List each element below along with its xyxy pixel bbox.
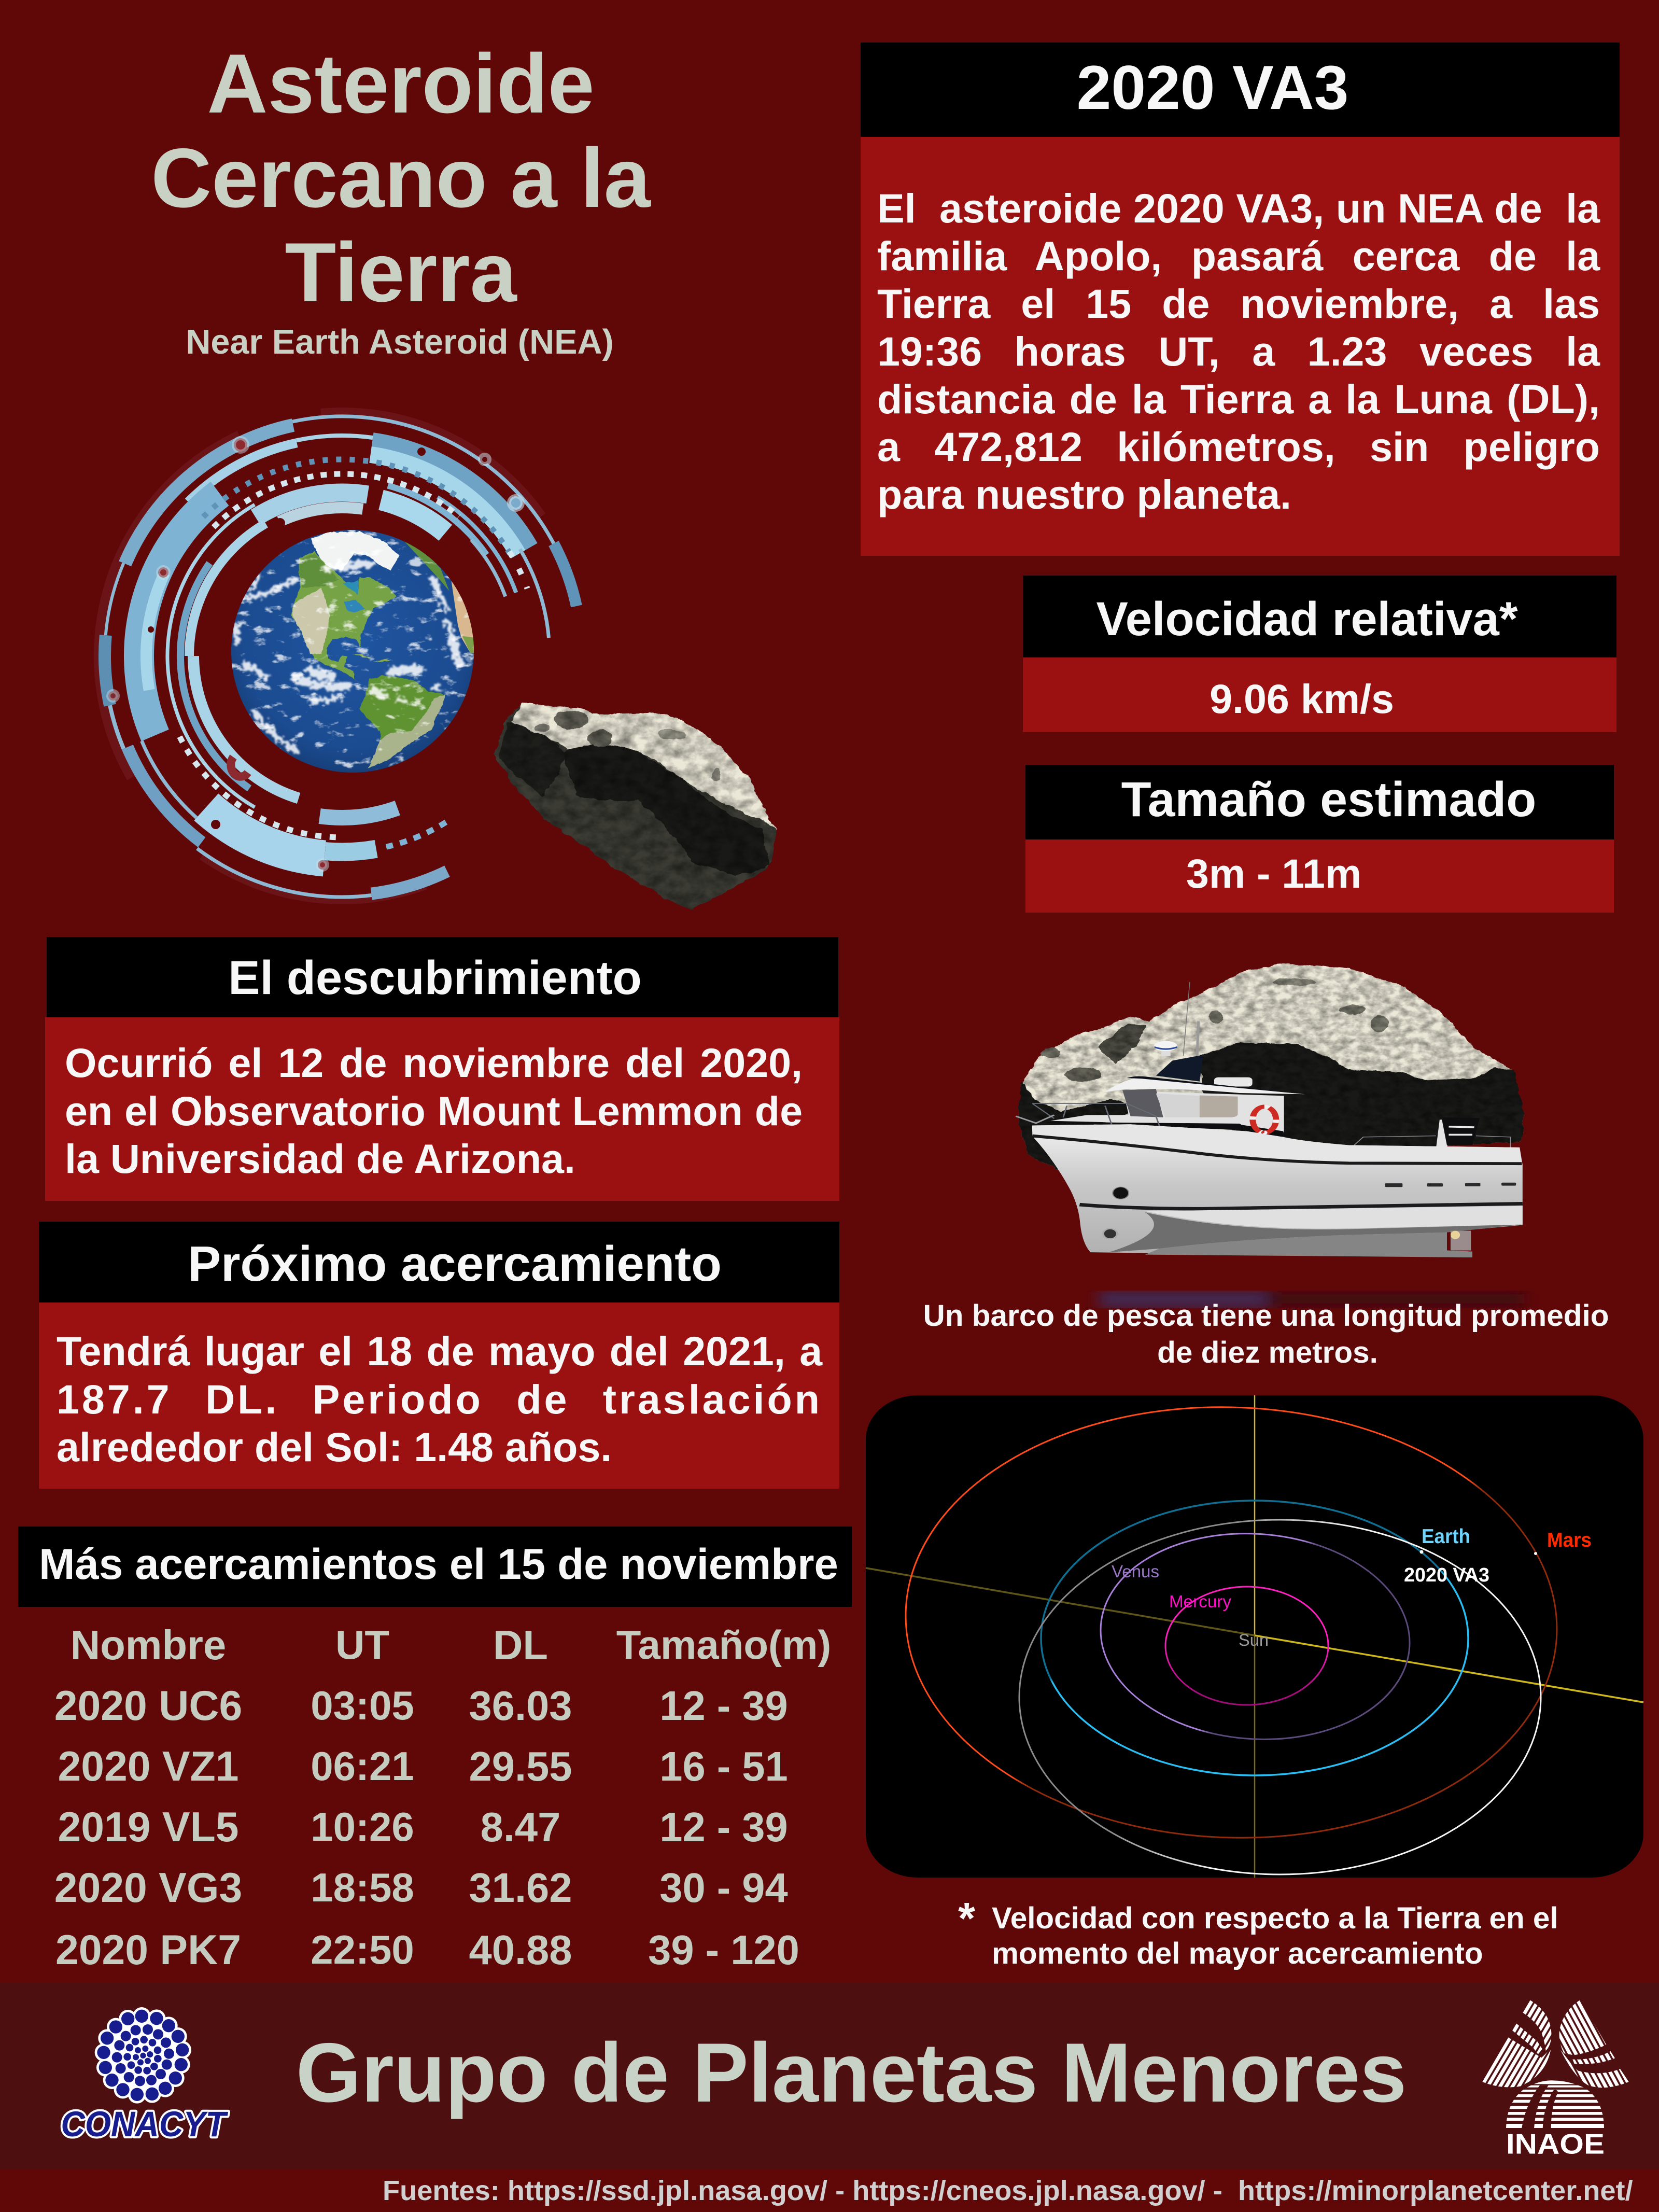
header bar (1025, 765, 1614, 839)
heading: El descubrimiento (228, 951, 642, 1004)
table: más acercamientos: 40.88 (469, 1927, 572, 1973)
caption: boat comparison: de diez metros. (1157, 1336, 1378, 1369)
table: más acercamientos: 2020 PK7 (55, 1927, 241, 1973)
cloud bands (237, 564, 460, 750)
footnote: * (958, 1894, 975, 1943)
table: más acercamientos: 2020 VZ1 (58, 1743, 239, 1790)
heading: Velocidad relativa* (1096, 593, 1518, 646)
footer title: Grupo de Planetas Menores (296, 2026, 1407, 2120)
description: para nuestro planeta. (877, 471, 1291, 517)
hull (1032, 1124, 1523, 1257)
text: alrededor del Sol: 1.48 años. (57, 1424, 612, 1470)
heading: Tamaño estimado (1121, 772, 1536, 827)
body box (39, 1303, 839, 1489)
table: más acercamientos: 36.03 (469, 1683, 572, 1729)
footer band (0, 1983, 1659, 2169)
text (65, 1039, 803, 1183)
value: 3m - 11m (1186, 850, 1361, 897)
superstructure (1016, 982, 1511, 1149)
title: Asteroide (207, 37, 595, 131)
text: Tendrá lugar el 18 de mayo del 2021, a (57, 1328, 822, 1374)
body box (45, 1017, 839, 1201)
table: más acercamientos (0, 1625, 881, 1972)
table: más acercamientos: 22:50 (311, 1927, 414, 1972)
panel: velocidad relativa (1023, 576, 1616, 732)
table: más acercamientos: 2020 VG3 (54, 1865, 242, 1911)
ring markers (108, 438, 523, 870)
header bar (1023, 576, 1616, 657)
description: distancia de la Tierra a la Luna (DL), (877, 376, 1600, 422)
title (151, 37, 651, 319)
asteroid behind boat (1018, 963, 1524, 1169)
icon: asteroid (494, 703, 776, 909)
body box (861, 137, 1620, 556)
logo: CONACYT: CONACYT (61, 2105, 229, 2144)
header bar (47, 937, 838, 1017)
table: más acercamientos: Tamaño(m) (616, 1622, 831, 1668)
icon: Earth globe (230, 529, 475, 774)
rings (9, 323, 675, 989)
text: la Universidad de Arizona. (65, 1136, 575, 1182)
subtitle: Near Earth Asteroid (NEA) (186, 323, 614, 361)
header bar (861, 43, 1620, 137)
table: más acercamientos: 10:26 (311, 1804, 414, 1850)
Europe limb (404, 541, 449, 591)
value box (1023, 657, 1616, 732)
table: más acercamientos: 18:58 (311, 1865, 414, 1910)
heading: Próximo acercamiento (188, 1236, 722, 1292)
Arctic ice (311, 531, 399, 570)
caption: boat comparison (923, 1299, 1609, 1369)
text: Ocurrió el 12 de noviembre del 2020, (65, 1040, 803, 1086)
title: Tierra (285, 226, 517, 319)
logo: INAOE (1482, 2000, 1629, 2160)
table: más acercamientos: 12 - 39 (659, 1804, 788, 1850)
panel: 2020 VA3 (861, 43, 1620, 556)
table heading: Más acercamientos el 15 de noviembre (39, 1540, 838, 1588)
caption glow (1099, 1292, 1524, 1307)
panel: Próximo acercamiento (39, 1222, 839, 1489)
panel: El descubrimiento (45, 937, 839, 1201)
logos (60, 2000, 1629, 2154)
description: 19:36 horas UT, a 1.23 veces la (877, 328, 1600, 374)
footnote: Velocidad con respecto a la Tierra en el (992, 1901, 1558, 1935)
table: más acercamientos: 2020 UC6 (54, 1683, 242, 1729)
illustration: Earth, tech rings and asteroid (94, 408, 777, 910)
value box (1025, 839, 1614, 913)
title: Cercano a la (151, 131, 651, 225)
orbit diagram: Earth (1422, 1525, 1470, 1548)
logo: INAOE: INAOE (1506, 2127, 1605, 2160)
table: más acercamientos: 12 - 39 (659, 1683, 788, 1729)
table: más acercamientos: 16 - 51 (659, 1743, 788, 1789)
Africa limb (451, 579, 475, 653)
footnote (954, 1897, 1566, 1969)
heading: 2020 VA3 (1077, 53, 1348, 122)
table: más acercamientos: 06:21 (311, 1743, 414, 1789)
table: más acercamientos: 29.55 (469, 1743, 572, 1789)
table: más acercamientos: UT (335, 1622, 389, 1668)
orbit diagram: 2020 VA3 (1404, 1564, 1489, 1586)
South America (359, 676, 446, 768)
table: más acercamientos: Nombre (71, 1622, 226, 1668)
description: familia Apolo, pasará cerca de la (877, 233, 1600, 279)
text: en el Observatorio Mount Lemmon de (65, 1088, 803, 1133)
Central America tail and Caribbean (353, 654, 390, 662)
table: más acercamientos: 31.62 (469, 1865, 572, 1911)
caption: boat comparison: Un barco de pesca tiene una longitud promedio (923, 1299, 1609, 1333)
table: más acercamientos: 2019 VL5 (58, 1804, 239, 1851)
description: El asteroide 2020 VA3, un NEA de la (877, 185, 1600, 231)
table heading (18, 1527, 852, 1607)
table: más acercamientos: 30 - 94 (659, 1865, 788, 1911)
table: más acercamientos: 8.47 (481, 1804, 560, 1850)
orbit diagram: Mars (1547, 1529, 1592, 1551)
text: 187.7 DL. Periodo de traslación (57, 1376, 822, 1422)
description (877, 185, 1600, 517)
orbit diagram: Sun (1239, 1631, 1269, 1649)
description: Tierra el 15 de noviembre, a las (877, 281, 1600, 327)
panel: tamaño estimado (1025, 765, 1614, 913)
logo: CONACYT (61, 2007, 229, 2144)
orbit diagram: Venus (1112, 1562, 1159, 1581)
footnote: momento del mayor acercamiento (992, 1937, 1483, 1970)
North America (291, 551, 396, 684)
table: más acercamientos: 03:05 (311, 1683, 414, 1728)
table: más acercamientos: 39 - 120 (648, 1927, 799, 1973)
table: más acercamientos: DL (493, 1622, 548, 1668)
text (57, 1327, 822, 1472)
value: 9.06 km/s (1210, 676, 1394, 722)
description: a 472,812 kilómetros, sin peligro (877, 424, 1600, 470)
sources: Fuentes: https://ssd.jpl.nasa.gov/ - https://cneos.jpl.nasa.gov/ - https://minorplanetcenter.net/ (383, 2175, 1633, 2206)
header bar (39, 1222, 839, 1303)
orbit diagram: Mercury (1169, 1592, 1231, 1611)
